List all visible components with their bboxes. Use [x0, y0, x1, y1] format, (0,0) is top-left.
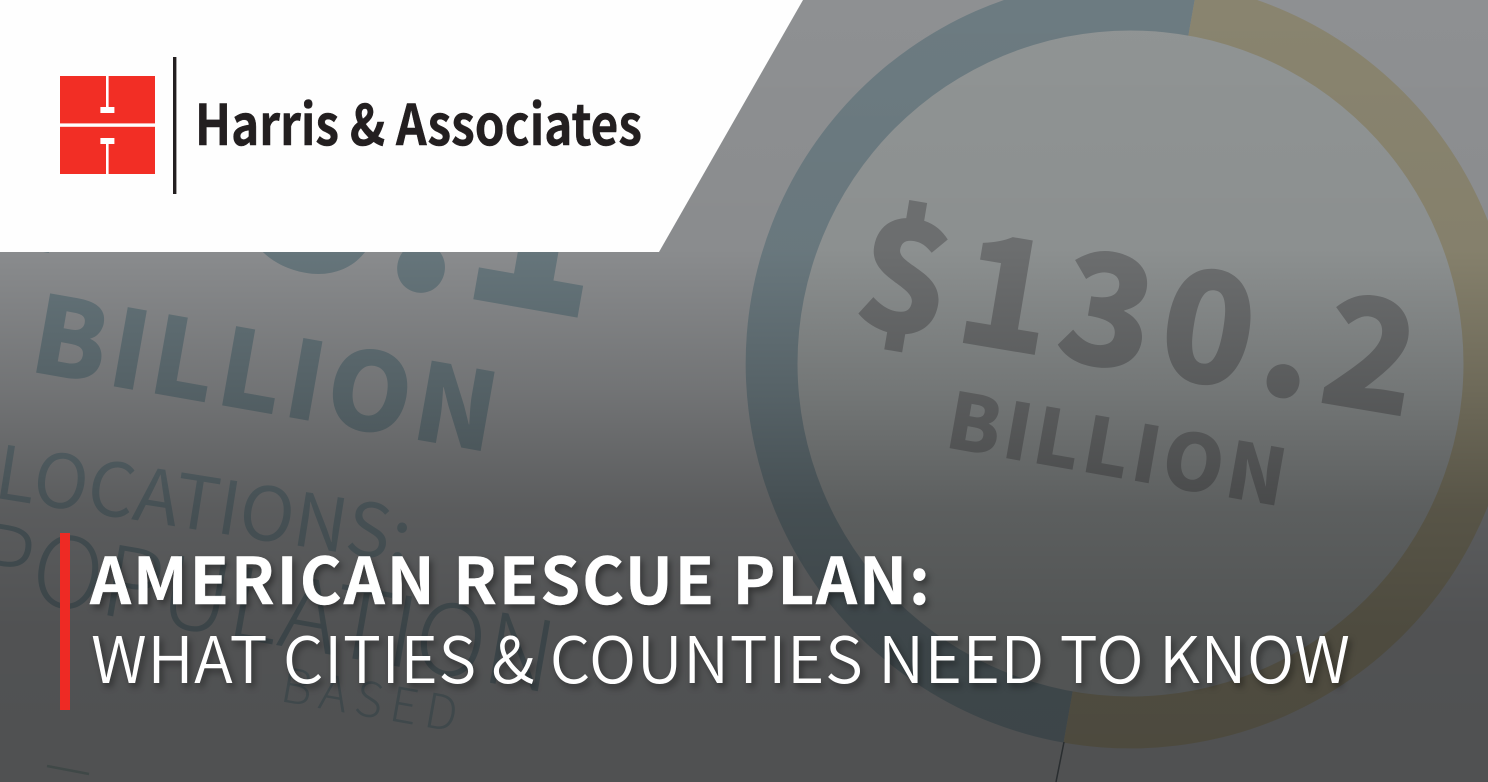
title line 1: AMERICAN RESCUE PLAN:	[90, 531, 932, 623]
red accent bar	[60, 533, 70, 710]
donut value: $130.2: $130.2	[843, 146, 1438, 462]
donut centre	[798, 30, 1464, 696]
left unit: BILLION: BILLION	[21, 249, 511, 484]
small rule bottom left	[47, 766, 89, 774]
left label: BASED: BASED	[277, 646, 464, 746]
icon: red split square mark	[60, 76, 155, 174]
leader line below donut	[1056, 742, 1064, 782]
logo divider line	[173, 57, 176, 194]
donut unit: BILLION: BILLION	[939, 359, 1296, 529]
logo	[60, 57, 642, 194]
donut segment: tan	[1064, 0, 1488, 748]
logo wordmark: Harris & Associates	[195, 81, 642, 162]
white logo panel	[0, 0, 803, 252]
title line 2: WHAT CITIES & COUNTIES NEED TO KNOW	[91, 610, 1351, 702]
donut segment: blue	[746, 0, 1197, 743]
